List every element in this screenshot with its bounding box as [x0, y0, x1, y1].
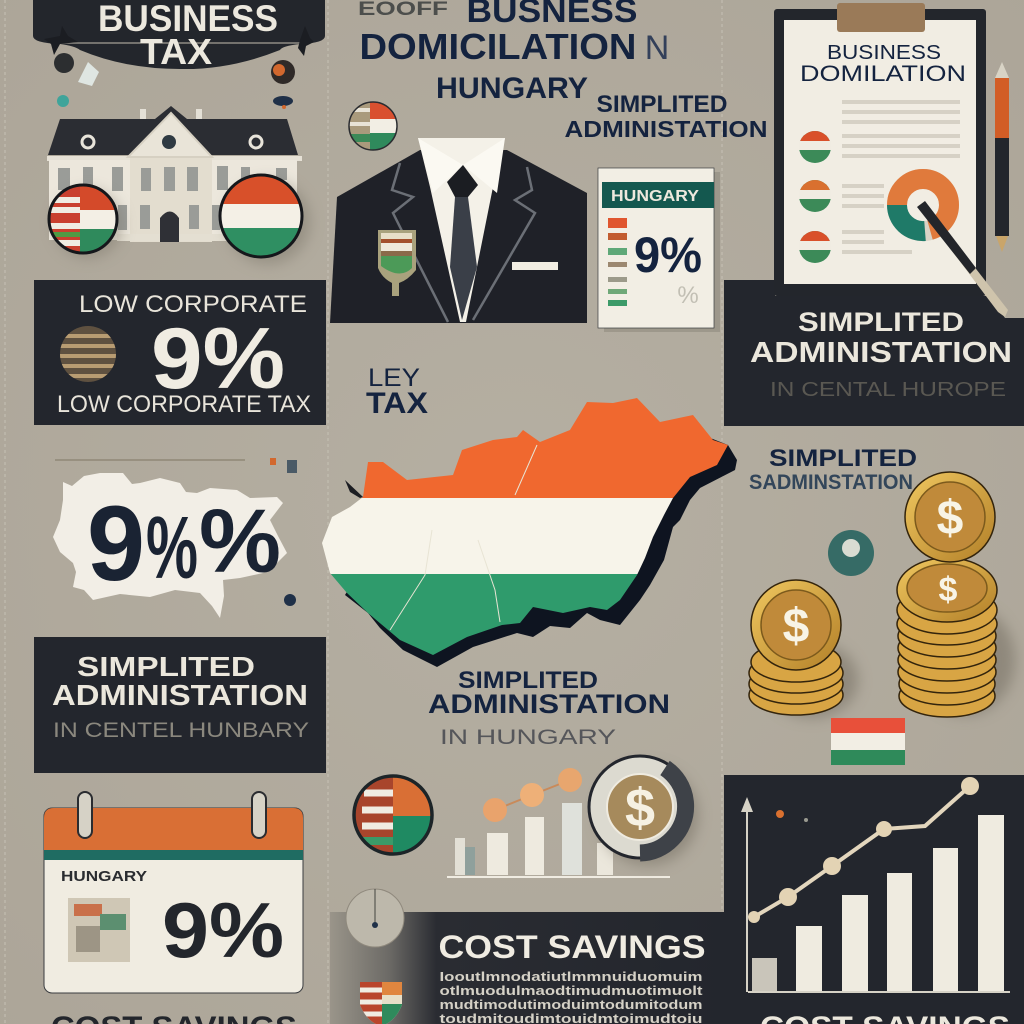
text: in central europe: IN CENTAL HUROPE [770, 379, 1006, 401]
number: 9: 9 [87, 483, 145, 603]
chart: donut [897, 179, 949, 231]
card: hungary 9 percent: % [677, 282, 699, 309]
text: body lines [440, 969, 703, 1024]
text: body lines: otlmuodulmaodtimudmuotimuolt [440, 983, 703, 998]
map: hungary flag [318, 395, 738, 667]
icon: coin stacks [749, 472, 1015, 718]
icon: pencil [917, 201, 1008, 317]
text: simplified: SIMPLITED [798, 307, 964, 337]
text: business: BUSINESS [827, 42, 941, 64]
text: key tax [366, 364, 428, 420]
icon: faint round dial [346, 889, 404, 947]
icon: small decorative dots [54, 53, 295, 109]
icon: flag circle left [48, 185, 122, 258]
text: simplified administration centre: SIMPLITED [458, 667, 598, 694]
text: simplified: SIMPLITED [77, 651, 255, 682]
text: low corporate tax: LOW CORPORATE TAX [57, 391, 311, 418]
icon: teal dot [828, 530, 874, 576]
icon: dollar coin dial [589, 756, 698, 865]
text: hungary label: HUNGARY [611, 188, 699, 205]
icon: collage [68, 898, 130, 962]
icon: right stack [897, 472, 997, 717]
icon: top coin dollar: $ [937, 492, 964, 545]
text: domilation: DOMILATION [800, 61, 966, 86]
icon: pen [995, 62, 1009, 252]
text: simplified sadministration: SIMPLITED [769, 445, 917, 472]
text: key tax: LEY [368, 364, 420, 392]
title: hungary: HUNGARY [436, 72, 588, 105]
heading: cost savings: COST SAVINGS [438, 929, 706, 965]
text: low corporate: LOW CORPORATE [79, 291, 307, 318]
text: simplified sadministration [749, 445, 917, 494]
text: body lines: mudtimodutimoduimtodumitodum [440, 997, 702, 1012]
text: simplified administration centre [428, 667, 670, 749]
icon: list flags [799, 131, 831, 263]
text: simplified sadministration: SADMINSTATION [749, 471, 913, 494]
icon: dollar coin dial: $ [625, 778, 655, 838]
icon: flag shield bottom [360, 981, 402, 1024]
text: simplified administration centre: ADMINISTATION [428, 689, 670, 719]
text: simplified administration top: SIMPLITED [596, 91, 728, 118]
icon: specks [270, 458, 297, 606]
text: body lines: Iooutlmnodatiutlmmnuiduomuim [440, 969, 702, 984]
icon: flag circle centre [354, 776, 433, 854]
text: simplified administration top [564, 91, 768, 142]
icon: striped globe [60, 326, 116, 382]
panel: page heading [358, 0, 669, 105]
number: 9 percent: 9% [151, 311, 285, 407]
text: hungary label: HUNGARY [61, 868, 147, 885]
panel: business tax banner [33, 0, 325, 72]
chart: bars [752, 815, 1004, 992]
text: in central hungary: IN CENTEL HUNBARY [53, 719, 309, 742]
text: simplified administration top: ADMINISTATION [564, 116, 768, 142]
title: domicilation: DOMICILATION [360, 26, 636, 67]
illustration: clipboard document [774, 3, 986, 296]
icon: small flag circle [349, 102, 397, 151]
text: administration: ADMINISTATION [52, 680, 308, 712]
icon: small flag [831, 718, 905, 765]
panel: torn paper 9 percent [53, 458, 297, 618]
icon: government building [47, 106, 302, 242]
icon: flag circle right [220, 175, 310, 264]
icon: stack coin dollar: $ [939, 571, 958, 609]
text: administration: ADMINISTATION [750, 337, 1012, 369]
number: 9 percent: 9% [162, 886, 284, 974]
number: 9 percent: 9% [634, 227, 702, 283]
illustration: suit [330, 138, 587, 323]
panel: growth chart [724, 775, 1024, 1024]
number: second percent sign: % [199, 492, 281, 592]
icon: left coin dollar: $ [783, 600, 810, 653]
icon: lapel flag badge [378, 230, 416, 296]
panel: cost savings centre [330, 889, 724, 1024]
icon: left stack [749, 580, 843, 715]
text: simplified administration centre: IN HUNGARY [440, 726, 616, 749]
panel: simplified administration left [34, 637, 326, 773]
number: first percent sign: % [146, 498, 198, 597]
panel: low corporate tax [34, 280, 326, 425]
panel: calendar [44, 792, 303, 993]
panel: simplified administration right [724, 280, 1024, 426]
card: hungary 9 percent [598, 168, 720, 332]
title: n: N [645, 29, 669, 67]
heading: tax: TAX [140, 31, 212, 72]
chart: small bar chart with coin [447, 756, 698, 877]
text: key tax: TAX [366, 387, 428, 420]
icon: orange pin [776, 810, 808, 822]
icon: colour key bars [608, 218, 627, 306]
chart: line with markers [748, 777, 979, 923]
